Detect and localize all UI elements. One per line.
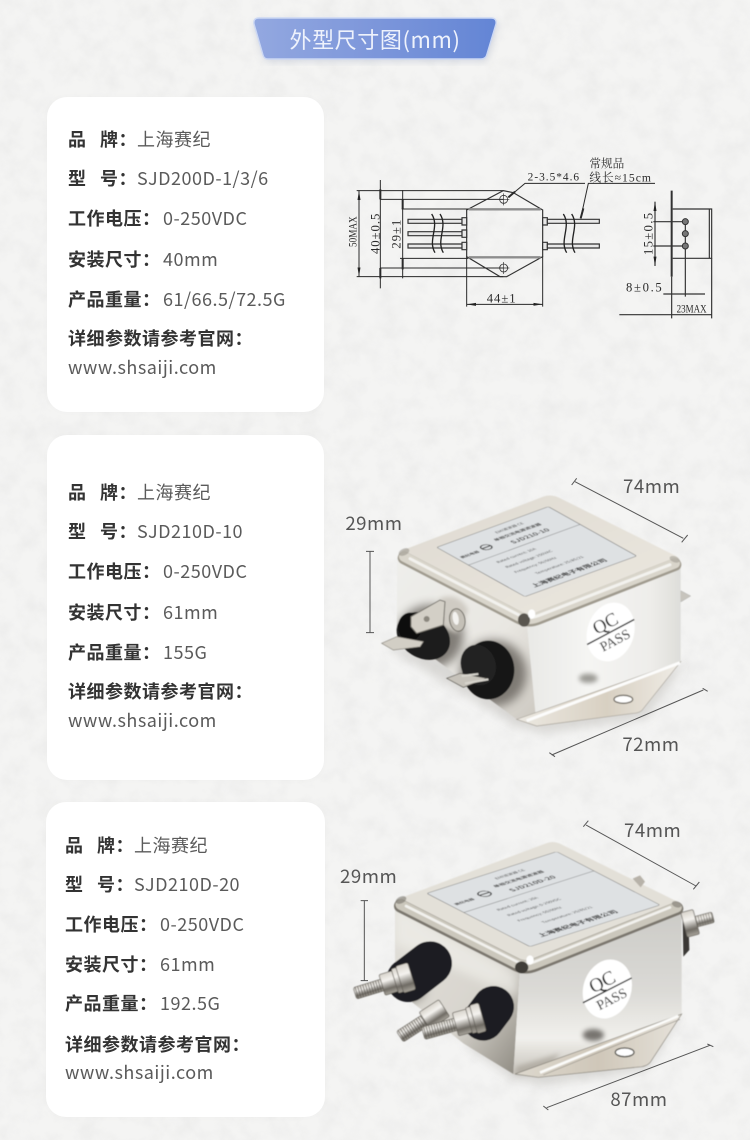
nameplate: Rated voltage: 0-250VDC	[505, 897, 564, 917]
dimension labels: 72mm	[622, 730, 680, 757]
brand row: 品 牌：上海赛纪	[68, 126, 211, 152]
nameplate	[437, 507, 637, 597]
website address: www.shsaiji.com	[68, 354, 217, 380]
dimension labels: 40±0.5	[368, 213, 382, 254]
nameplate: EMI滤波器 CE	[493, 868, 527, 880]
dimension labels	[345, 472, 680, 757]
mounting size row: 安装尺寸：61mm	[68, 599, 218, 625]
panel: SJD200D specs	[47, 97, 324, 412]
dimension marks	[361, 821, 713, 1110]
QC PASS sticker	[578, 596, 643, 668]
dimension labels: 23MAX	[677, 303, 707, 315]
model row: 型 号：SJD210D-20	[65, 871, 240, 897]
dimension labels: 29±1	[389, 219, 403, 249]
dimension labels	[340, 816, 681, 1112]
dimension labels: 29mm	[340, 862, 397, 889]
filter body	[388, 842, 682, 1085]
website note: 详细参数请参考官网：	[68, 678, 253, 704]
weight row: 产品重量：155G	[68, 639, 207, 665]
weight row: 产品重量：61/66.5/72.5G	[68, 286, 286, 312]
nameplate: 上海赛纪电子有限公司	[534, 909, 621, 938]
brand row: 品 牌：上海赛纪	[68, 479, 211, 505]
dimension labels: 74mm	[623, 472, 680, 499]
voltage row: 工作电压：0-250VDC	[68, 558, 247, 584]
dimension labels: 常规品	[589, 156, 625, 170]
dimension labels: 44±1	[487, 291, 517, 305]
panel: SJD210D-20 specs	[46, 802, 325, 1117]
model row: 型 号：SJD200D-1/3/6	[68, 165, 269, 191]
dimension labels: 29mm	[345, 509, 403, 536]
QC PASS sticker: PASS	[595, 986, 630, 1014]
nameplate: Frequency: 50/60Hz	[513, 556, 559, 574]
nameplate: Rated current: 20A	[495, 896, 541, 912]
QC PASS sticker: QC	[589, 609, 622, 639]
website address: www.shsaiji.com	[68, 707, 217, 733]
chart: outline dimension drawing	[346, 156, 712, 318]
dimension labels: 74mm	[624, 816, 681, 843]
terminals	[382, 600, 514, 699]
nameplate: Temperature: 25/85/21	[540, 906, 595, 924]
title banner: 外型尺寸图(mm)	[289, 23, 461, 55]
website note: 详细参数请参考官网：	[65, 1031, 250, 1057]
nameplate: EMI滤波器 CE	[493, 521, 526, 534]
filter side view	[619, 191, 712, 318]
dimension labels: 线长≈15cm	[589, 170, 652, 184]
dimension marks	[366, 478, 708, 757]
nameplate: 赛纪电器	[452, 897, 477, 906]
nameplate: Rated current: 10A	[494, 547, 539, 564]
title banner	[252, 17, 499, 64]
website note: 详细参数请参考官网：	[68, 325, 253, 351]
voltage row: 工作电压：0-250VDC	[68, 205, 247, 231]
mounting size row: 安装尺寸：61mm	[65, 951, 215, 977]
dimension labels: 50MAX	[346, 216, 360, 247]
nameplate: Rated voltage: 250VAC	[503, 549, 555, 569]
nameplate: SJD210D-20	[506, 874, 559, 893]
dimension labels: 87mm	[610, 1085, 668, 1112]
voltage row: 工作电压：0-250VDC	[65, 911, 244, 937]
nameplate: Frequency: 50/60Hz	[516, 906, 565, 922]
QC PASS sticker: PASS	[598, 627, 633, 655]
dimension labels	[346, 156, 707, 315]
dimension labels: 8±0.5	[626, 281, 663, 295]
studs and insulators	[351, 905, 716, 1047]
product photo: SJD210D-10 with dimensions	[345, 472, 708, 758]
nameplate: 上海赛纪电子有限公司	[529, 558, 610, 589]
product photo: SJD210D-20 with dimensions	[340, 816, 716, 1112]
website address: www.shsaiji.com	[65, 1059, 214, 1085]
QC PASS sticker: QC	[586, 967, 619, 998]
panel: SJD210D-10 specs	[47, 435, 324, 780]
model row: 型 号：SJD210D-10	[68, 518, 243, 544]
nameplate: Temperature: 25/85/21	[534, 555, 586, 575]
filter body front view	[467, 191, 543, 277]
wires and terminals	[408, 214, 599, 253]
filter body	[385, 495, 691, 733]
nameplate: 赛纪电器	[458, 549, 482, 559]
nameplate	[427, 852, 660, 947]
mounting size row: 安装尺寸：40mm	[68, 246, 218, 272]
nameplate: SJD210-10	[508, 527, 553, 545]
QC PASS sticker	[574, 953, 640, 1025]
dimension labels: 15±0.5	[642, 212, 656, 255]
nameplate: 单相交流电源滤波器	[491, 869, 547, 888]
weight row: 产品重量：192.5G	[65, 990, 220, 1016]
brand row: 品 牌：上海赛纪	[65, 832, 208, 858]
nameplate: 单相交流电源滤波器	[492, 522, 544, 542]
dimension lines	[357, 180, 655, 307]
dimension labels: 2-3.5*4.6	[528, 172, 580, 184]
